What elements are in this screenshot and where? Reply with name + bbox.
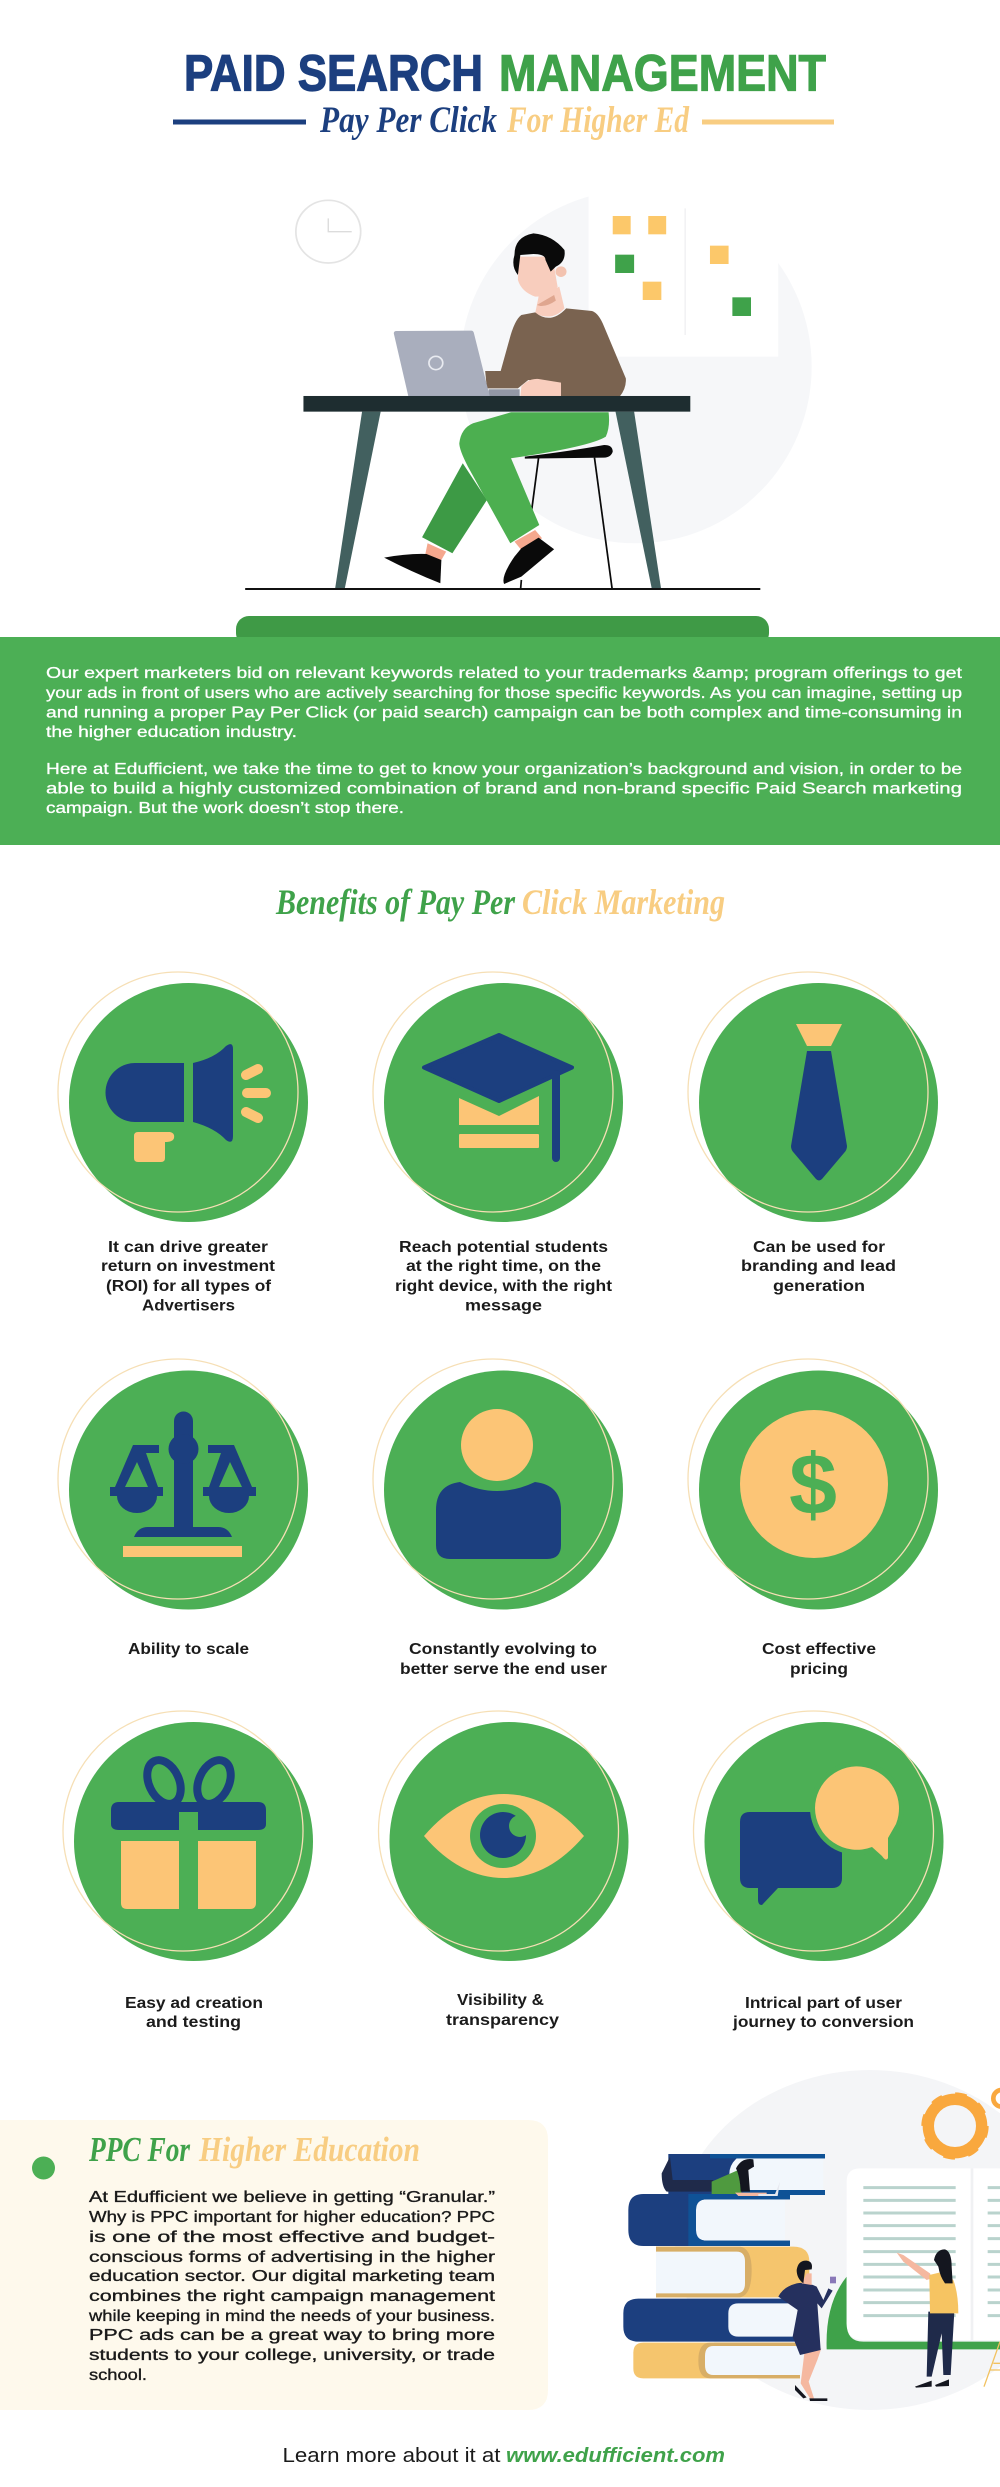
caption: It can drive greater <box>108 1239 268 1256</box>
benefit: reach students <box>373 972 623 1314</box>
intro paragraph two: campaign. But the work doesn’t stop there. <box>46 800 404 817</box>
intro paragraph one <box>46 665 963 741</box>
caption: return on investment <box>101 1258 276 1275</box>
icon: dollar coin <box>740 1410 888 1558</box>
panel body text: Why is PPC important for higher education? PPC <box>89 2209 495 2226</box>
illustration: books and students <box>623 2070 1000 2410</box>
benefit: evolving <box>373 1359 623 1678</box>
panel body text: students to your college, university, or trade <box>89 2347 495 2364</box>
icon: wall clock <box>296 200 361 263</box>
heading: benefits <box>275 882 725 922</box>
caption: Visibility & <box>457 1992 544 2009</box>
panel body text: while keeping in mind the needs of your business. <box>88 2308 495 2325</box>
benefit: user journey <box>694 1711 944 2031</box>
panel body text: is one of the most effective and budget- <box>89 2229 495 2246</box>
bullet dot <box>32 2156 55 2180</box>
title: PAID SEARCH <box>184 44 483 102</box>
caption <box>395 1239 613 1314</box>
panel body text <box>88 2189 496 2384</box>
illustration: man working at desk <box>245 180 812 589</box>
subtitle: For Higher Ed <box>506 100 689 141</box>
lying student with laptop <box>662 2157 780 2196</box>
panel body text: PPC ads can be a great way to bring more <box>89 2327 495 2344</box>
icon: graduation cap <box>424 1035 572 1158</box>
icon: user <box>436 1409 561 1559</box>
open book <box>827 2168 1000 2349</box>
icon: gears <box>924 2090 1000 2157</box>
panel body text: education sector. Our digital marketing team <box>89 2268 495 2285</box>
benefit: ad creation <box>63 1711 313 2031</box>
ladder <box>984 2342 1000 2387</box>
caption: transparency <box>446 2012 559 2029</box>
intro paragraph one: the higher education industry. <box>46 724 297 741</box>
panel body text: conscious forms of advertising in the higher <box>89 2249 496 2266</box>
caption: (ROI) for all types of <box>106 1278 272 1295</box>
benefit: pricing <box>688 1359 938 1678</box>
caption <box>732 1995 914 2031</box>
title <box>184 44 826 102</box>
heading: benefits: Benefits of Pay Per <box>275 882 516 922</box>
intro paragraph two: Here at Edufficient, we take the time to get to know your organization’s background and vision, in order to be <box>46 761 962 778</box>
intro paragraph one: and running a proper Pay Per Click (or paid search) campaign can be both complex and time-consuming in <box>46 704 962 722</box>
caption <box>101 1239 276 1314</box>
caption: branding and lead <box>741 1258 896 1275</box>
caption: message <box>465 1298 542 1314</box>
footer call to action <box>282 2445 725 2467</box>
caption: Reach potential students <box>399 1239 608 1256</box>
footer call to action: Learn more about it at <box>282 2445 501 2467</box>
laptop <box>394 331 520 397</box>
student pointing at book <box>897 2249 958 2388</box>
caption: better serve the end user <box>400 1661 607 1678</box>
intro paragraph two <box>46 761 962 817</box>
panel body text: school. <box>89 2367 147 2384</box>
panel heading: Higher Education <box>198 2130 420 2169</box>
icon: necktie <box>791 1024 847 1180</box>
icon: chat bubbles <box>740 1761 904 1905</box>
caption: Easy ad creation <box>125 1995 263 2012</box>
caption: Can be used for <box>753 1239 885 1256</box>
sticky notes <box>613 216 751 316</box>
panel body text: combines the right campaign management <box>89 2288 496 2305</box>
panel heading <box>88 2130 420 2169</box>
intro paragraph two: able to build a highly customized combination of brand and non-brand specific Paid Search marketing <box>46 780 962 798</box>
panel heading: PPC For <box>88 2130 190 2169</box>
icon: gift <box>111 1755 266 1909</box>
caption: Advertisers <box>142 1298 235 1314</box>
caption <box>400 1641 607 1678</box>
standing student with phone <box>778 2261 836 2401</box>
benefit: ROI <box>58 972 308 1314</box>
desk <box>303 396 690 588</box>
caption: right device, with the right <box>395 1278 613 1295</box>
title: MANAGEMENT <box>499 44 826 102</box>
caption: journey to conversion <box>732 2014 914 2031</box>
pill above banner <box>236 616 769 646</box>
icon: eye <box>424 1794 584 1878</box>
caption <box>446 1992 559 2029</box>
benefit: visibility <box>378 1711 628 2029</box>
caption: Cost effective <box>762 1641 876 1658</box>
caption: generation <box>773 1278 865 1295</box>
footer call to action: www.edufficient.com <box>506 2445 725 2467</box>
panel body text: At Edufficient we believe in getting “Granular.” <box>89 2189 495 2206</box>
subtitle: Pay Per Click <box>319 100 497 141</box>
stack of books <box>623 2154 825 2378</box>
caption: pricing <box>790 1661 848 1678</box>
caption: and testing <box>146 2014 241 2031</box>
caption: Ability to scale <box>128 1641 249 1658</box>
stool <box>525 445 613 588</box>
caption <box>762 1641 876 1678</box>
intro paragraph one: Our expert marketers bid on relevant keywords related to your trademarks &amp; program offerings to get <box>46 665 963 682</box>
benefit: scale <box>58 1359 308 1658</box>
icon: dollar coin: $ <box>789 1437 837 1533</box>
subtitle <box>173 100 834 141</box>
caption <box>125 1995 263 2031</box>
caption: Intrical part of user <box>745 1995 902 2012</box>
caption <box>741 1239 896 1295</box>
panel: PPC for higher education <box>0 2120 548 2410</box>
heading: benefits: Click Marketing <box>522 882 725 922</box>
caption: at the right time, on the <box>406 1258 601 1275</box>
intro paragraph one: your ads in front of users who are actively searching for those specific keywords. As you can imagine, setting up <box>46 685 962 702</box>
caption: Constantly evolving to <box>409 1641 597 1658</box>
panel: intro banner <box>0 637 1000 845</box>
man <box>384 233 626 584</box>
icon: balance scale <box>110 1412 256 1557</box>
benefit: branding <box>688 972 938 1295</box>
icon: megaphone <box>106 1044 266 1162</box>
